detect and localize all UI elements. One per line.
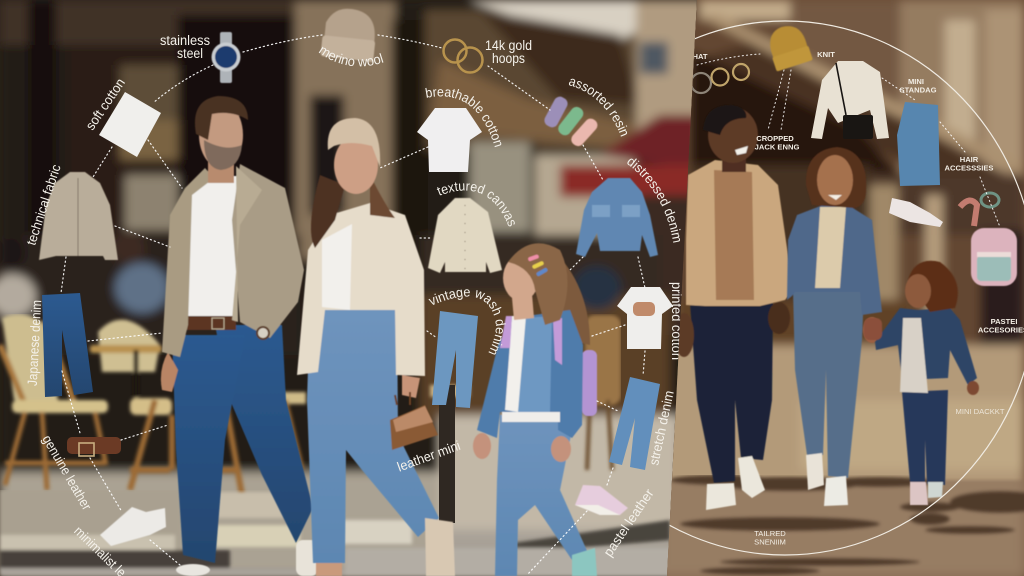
figure: smiling man: [674, 105, 793, 510]
label: leather mini: leather mini: [395, 438, 462, 475]
label: pastel accessories: PASTEI: [991, 317, 1017, 326]
label: assorted resin: assorted resin: [568, 78, 628, 137]
label: cropped jacket: JACK ENNG: [755, 142, 799, 152]
label: technical fabric: technical fabric: [23, 162, 64, 247]
item: black mini bag: [836, 63, 873, 139]
figure: child: [864, 261, 979, 505]
building and awning background: [660, 0, 1024, 576]
item: leather belt: [67, 437, 121, 456]
label: tailored denim: [754, 529, 786, 546]
panel: left street scene: [0, 0, 697, 576]
label: distressed denim: distressed denim: [627, 158, 681, 243]
label: tailored denim: TAILRED: [754, 529, 786, 538]
figure: woman in denim: [787, 147, 882, 506]
wet pavement puddles: [660, 475, 1024, 576]
label: tailored denim: SNENIIM: [754, 538, 786, 546]
pavement and kerb: [0, 490, 680, 576]
label: textured canvas: textured canvas: [436, 182, 515, 226]
item: pastel sneaker: [889, 198, 943, 227]
cafe chairs: [0, 314, 621, 495]
label: mini jacket: MINI DACKKT: [956, 407, 1005, 416]
item: pastel sneakers: [575, 485, 628, 515]
item: mustard beanie: [764, 21, 813, 72]
label: hair accessories: [945, 155, 993, 172]
arc: encircling line: [533, 21, 1024, 555]
label: genuine leather: genuine leather: [39, 432, 95, 513]
label: hair accessories: ACCESSSIES: [945, 164, 993, 172]
item: technical jacket: [39, 172, 118, 260]
label: pastel accessories: [978, 317, 1024, 334]
item: white sneakers: [100, 507, 166, 546]
dotted connectors: right: [697, 54, 1000, 227]
label: hair accessories: HAIR: [960, 155, 979, 164]
label: cropped jacket: CROPPED: [756, 134, 794, 143]
item: bracelets: [981, 193, 999, 207]
label: merino wool: merino wool: [318, 46, 384, 66]
item: vintage wash jeans: [432, 311, 478, 408]
label: Japanese denim: Japanese denim: [25, 300, 44, 386]
label: cropped jacket: [755, 134, 799, 152]
label: mini standag: STANDAG: [900, 86, 937, 94]
item: stretch jeans: [609, 377, 660, 470]
item: distressed denim jacket: [576, 178, 658, 257]
item: hair clips: [544, 96, 598, 147]
item: gold rings: [691, 64, 749, 93]
item: pink backpack: [971, 228, 1017, 286]
item: watch: [212, 32, 240, 83]
label: soft cotton: soft cotton: [83, 75, 128, 133]
panel: right street scene: [533, 0, 1024, 576]
label: breathable cotton: breathable cotton: [425, 88, 502, 148]
dotted connectors: left: [61, 35, 645, 575]
figure: woman: [297, 118, 455, 576]
cafe background: [0, 0, 706, 576]
figure: girl: [473, 243, 597, 576]
label: 14k gold hoops: 14k gold: [485, 38, 532, 53]
label: knit: KNIT: [817, 50, 835, 59]
item: scrunchie: [960, 200, 977, 226]
label: pastel leather: pastel leather: [601, 486, 657, 559]
label: vintage wash denim: vintage wash denim: [428, 289, 506, 355]
label: hat: HAT: [692, 52, 708, 61]
label: 14k gold hoops: [485, 38, 532, 66]
item: canvas shirt: [428, 198, 502, 273]
item: gold hoops: [444, 40, 482, 72]
label: stainless steel: [160, 35, 210, 58]
label: mini standag: MINI: [908, 77, 924, 86]
label: stainless steel: steel: [177, 46, 203, 61]
item: Japanese jeans: [42, 293, 93, 397]
label: stainless steel: stainless: [160, 33, 210, 48]
street post: [439, 385, 455, 523]
item: folded white tee: [99, 92, 161, 157]
item: printed tee: [617, 287, 673, 349]
item: white knit sweater: [811, 61, 889, 139]
item: merino beanie: [320, 6, 378, 63]
figure: man: [161, 96, 318, 576]
item: white cotton tee: [417, 108, 482, 172]
label: stretch denim: stretch denim: [646, 389, 677, 467]
label: mini standag: [900, 77, 937, 94]
label: 14k gold hoops: hoops: [492, 51, 525, 66]
item: denim skirt: [897, 102, 940, 186]
label: printed cotton: printed cotton: [669, 282, 684, 360]
